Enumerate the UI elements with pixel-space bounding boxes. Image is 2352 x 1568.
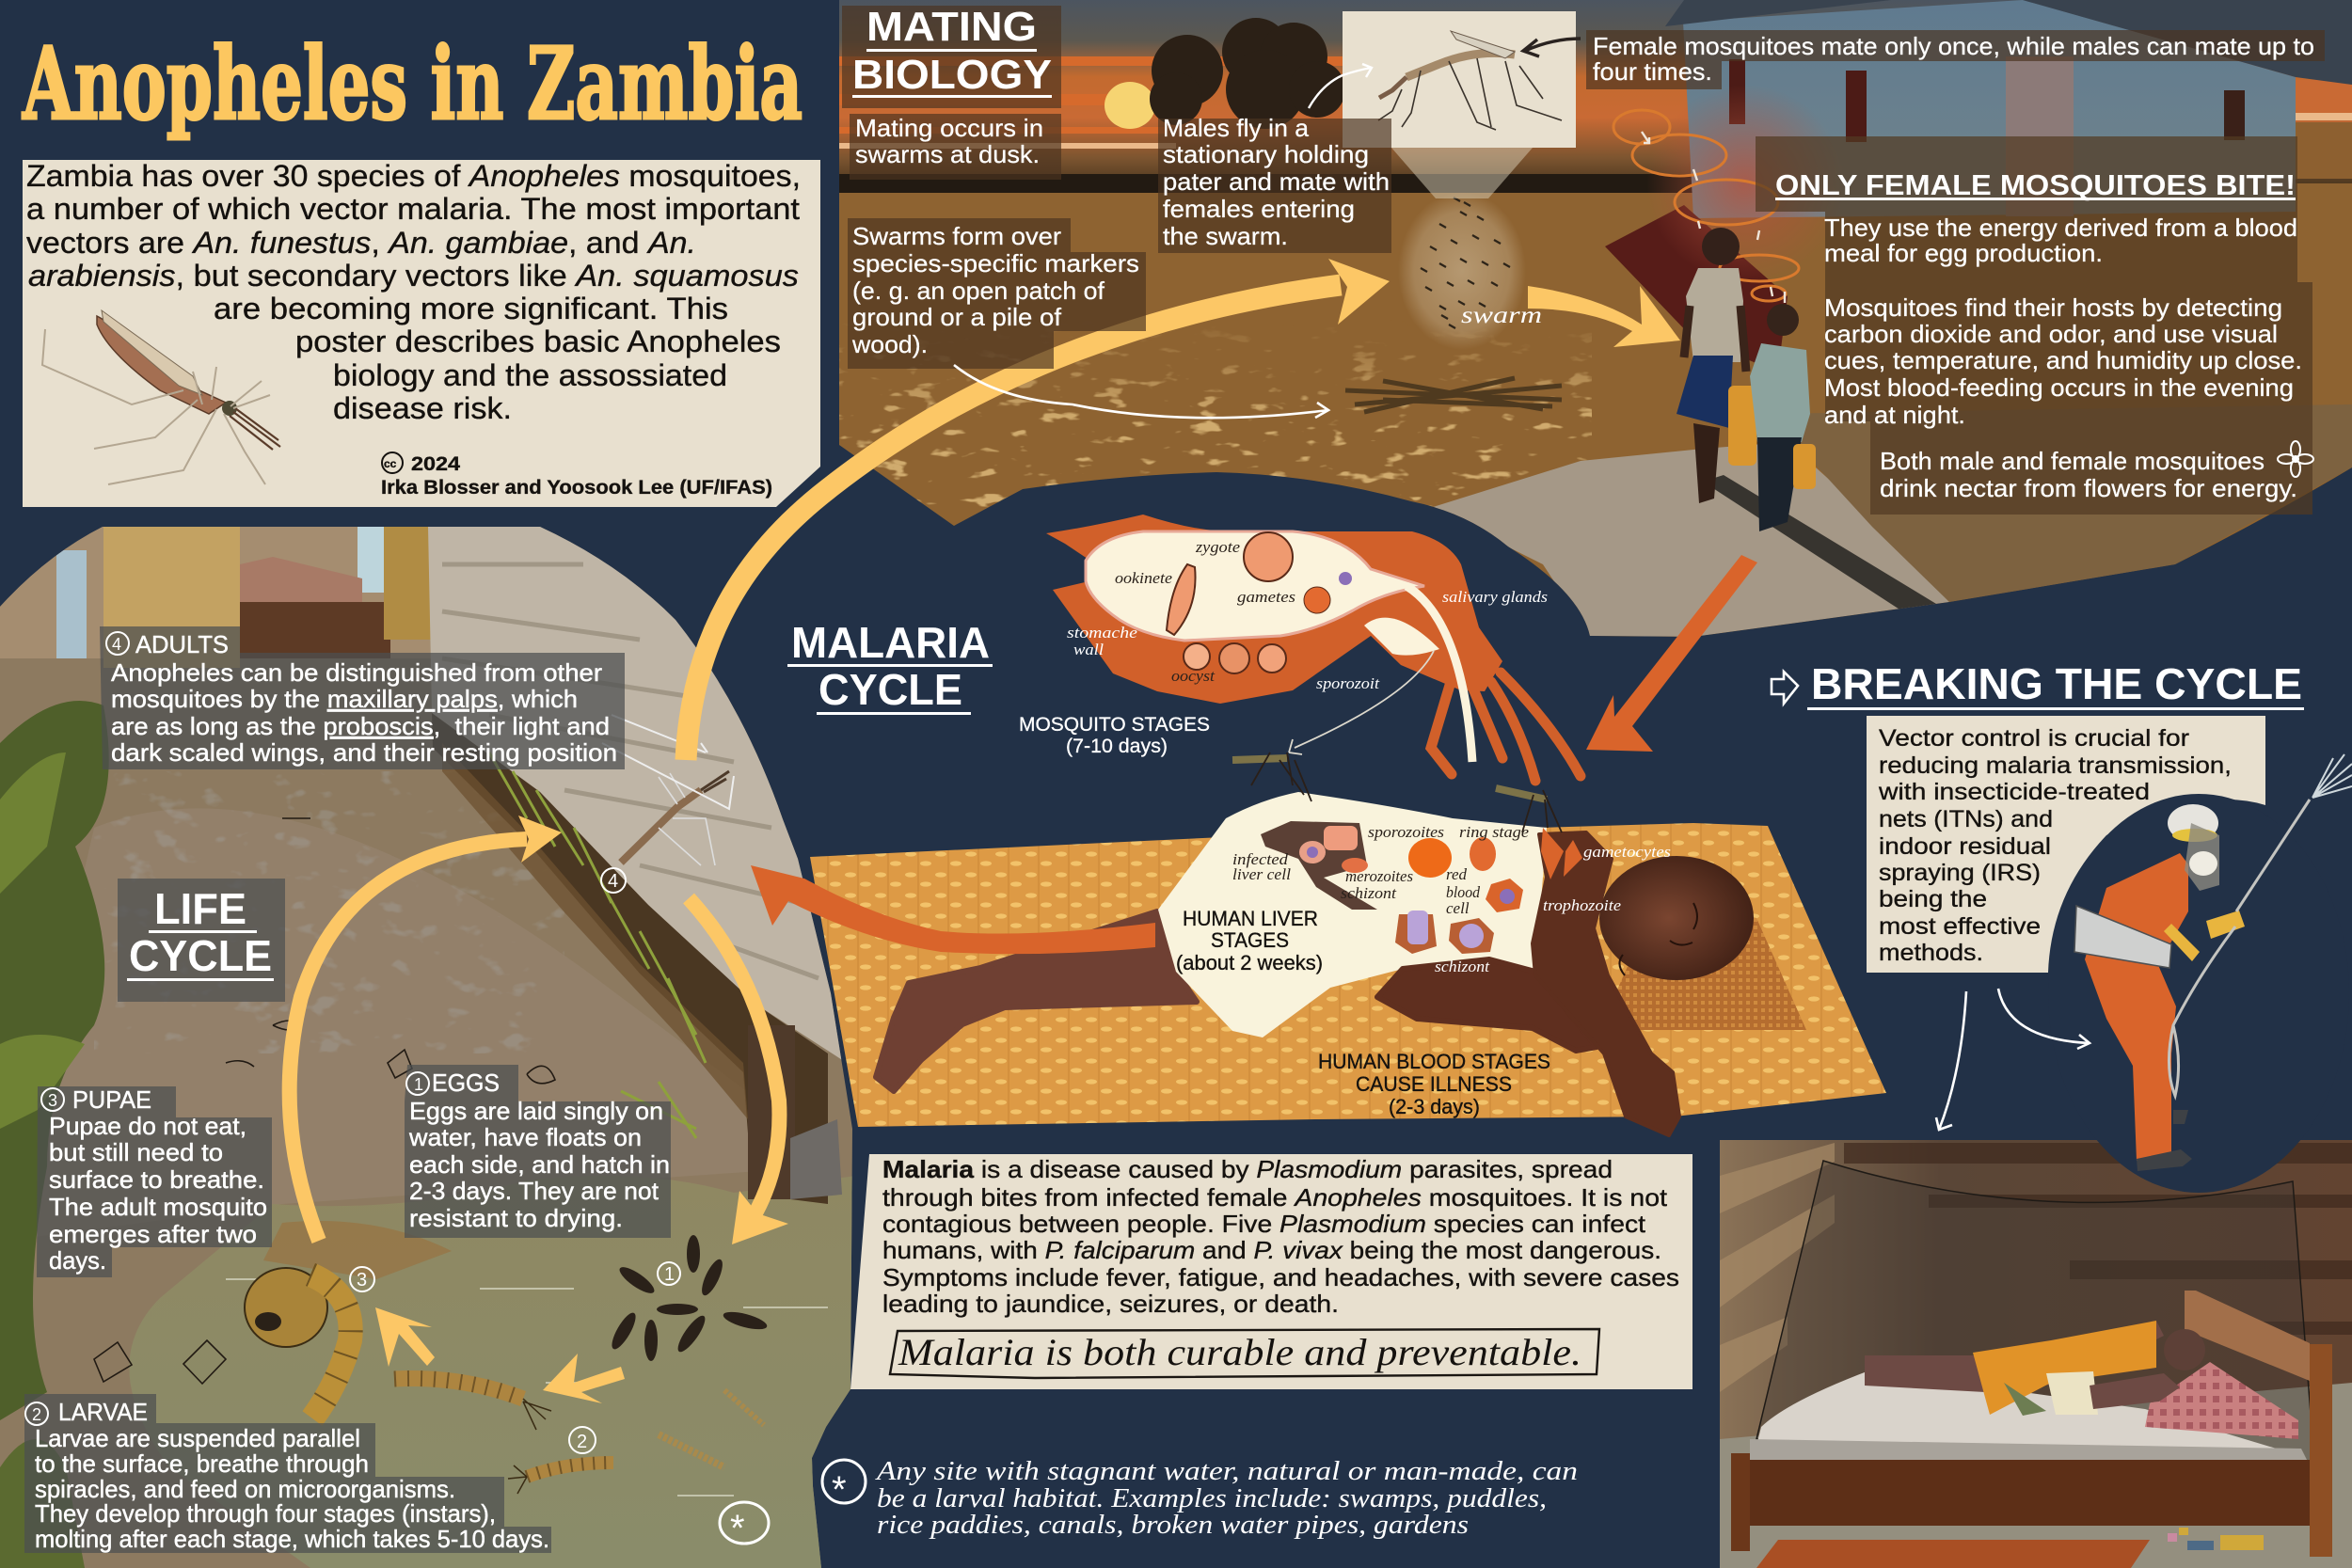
text: swarm markers: wood). bbox=[851, 330, 928, 358]
label: stomache wall: stomache bbox=[1067, 624, 1138, 641]
mouthparts bbox=[1431, 673, 1581, 781]
text: mating at dusk: swarms at dusk. bbox=[855, 140, 1040, 168]
arm bbox=[1533, 832, 1679, 1135]
road bbox=[1430, 442, 1949, 637]
panel: malaria description: through bites from infected female Anopheles mosquitoes. It is not bbox=[882, 1183, 1668, 1212]
panel: only female mosquitoes bite: ONLY FEMALE MOSQUITOES BITE! bbox=[1775, 168, 2296, 201]
eggs bbox=[608, 1235, 769, 1361]
panel: only female mosquitoes bite: meal for egg production. bbox=[1824, 239, 2103, 267]
panel: malaria description: Symptoms include fever, fatigue, and headaches, with severe cases bbox=[882, 1263, 1679, 1291]
text: mosquito stages: (7-10 days) bbox=[1066, 736, 1168, 757]
panel: vector control text: being the bbox=[1879, 886, 1987, 912]
heading: mating biology: MATING bbox=[866, 4, 1037, 50]
text: human blood stages: CAUSE ILLNESS bbox=[1356, 1072, 1512, 1096]
heading: life cycle: CYCLE bbox=[129, 931, 272, 980]
text: female mate once bbox=[1586, 30, 2325, 89]
text: males fly: pater and mate with bbox=[1163, 167, 1390, 196]
rocks bbox=[94, 818, 555, 1384]
post bbox=[748, 1025, 795, 1199]
text: larvae: They develop through four stages (instars), bbox=[35, 1499, 496, 1528]
helmet bbox=[2168, 804, 2218, 842]
face lines bbox=[1619, 903, 1697, 975]
text: eggs: Eggs are laid singly on bbox=[409, 1097, 663, 1125]
panel: only female mosquitoes bite: drink nectar from flowers for energy. bbox=[1880, 474, 2297, 502]
text: larvae: Larvae are suspended parallel bbox=[35, 1424, 360, 1452]
panel: navy circle with sprayer bbox=[2048, 794, 2349, 1193]
callout: curable and preventable: Malaria is both curable and preventable. bbox=[898, 1331, 1581, 1373]
headboard bbox=[2185, 1291, 2310, 1381]
net bbox=[1756, 1161, 2314, 1463]
star habitat marker bbox=[720, 1502, 769, 1549]
title: Anopheles in Zambia bbox=[22, 24, 803, 142]
liver bbox=[1261, 821, 1377, 910]
arrow: human back to mosquito bbox=[751, 865, 1155, 954]
biting mosquitoes bbox=[1232, 752, 1562, 832]
label: red blood cell: red bbox=[1446, 865, 1468, 883]
icon: larval habitat star bbox=[822, 1460, 866, 1511]
text: adults: are as long as the proboscis, their light and bbox=[111, 712, 610, 740]
liver cells bbox=[1324, 826, 1358, 850]
gametocyte cells bbox=[1541, 828, 1582, 879]
panel: introduction: disease risk. bbox=[333, 391, 512, 425]
panel: malaria description: leading to jaundice, seizures, or death. bbox=[882, 1290, 1339, 1318]
stage markers: 4 bbox=[608, 871, 618, 892]
label: infected liver cell bbox=[1232, 850, 1291, 883]
panel: introduction: biology and the assossiated bbox=[333, 358, 727, 392]
text: mating at dusk bbox=[850, 114, 1061, 180]
water bbox=[129, 1176, 856, 1568]
panel: malaria description: Malaria is a disease caused by Plasmodium parasites, spread bbox=[882, 1155, 1613, 1183]
wood pile bbox=[1345, 378, 1562, 412]
panel: only female mosquitoes bite bbox=[1756, 136, 2312, 515]
label: ookinete: ookinete bbox=[1115, 569, 1172, 587]
text: human liver stages: HUMAN LIVER bbox=[1183, 907, 1318, 930]
arrow: eggs to larva bbox=[543, 1354, 625, 1403]
text: mating at dusk: Mating occurs in bbox=[855, 114, 1043, 142]
sprayer worker bbox=[2074, 754, 2352, 1171]
panel: only female mosquitoes bite: Most blood-feeding occurs in the evening bbox=[1824, 373, 2294, 402]
text: human liver stages: STAGES bbox=[1211, 928, 1289, 952]
text: males fly: the swarm. bbox=[1163, 222, 1288, 250]
text: eggs: water, have floats on bbox=[408, 1123, 642, 1151]
text: adults: Anopheles can be distinguished from other bbox=[111, 658, 602, 687]
arrow: adult to eggs bbox=[689, 898, 779, 1218]
panel: vector control text: nets (ITNs) and bbox=[1879, 806, 2053, 832]
highlights bbox=[226, 1279, 828, 1496]
arrow head: adult to swarm bbox=[1328, 259, 1390, 325]
panel: vector control text: indoor residual bbox=[1879, 833, 2051, 860]
arrow: markers to wood pile bbox=[954, 365, 1328, 418]
text: males fly: stationary holding bbox=[1163, 140, 1369, 168]
toys bbox=[2168, 1528, 2264, 1550]
label: red blood cell bbox=[1446, 865, 1480, 917]
text: swarm markers: (e. g. an open patch of bbox=[852, 277, 1105, 305]
text: larval habitat note: rice paddies, canals, broken water pipes, gardens bbox=[877, 1511, 1469, 1540]
panel: life cycle scene bbox=[0, 527, 856, 1568]
heading: malaria cycle: MALARIA bbox=[791, 618, 990, 667]
panel: malaria description bbox=[850, 1154, 1692, 1389]
arrow: salivary to biting mosquito bbox=[1289, 651, 1434, 754]
text: pupae: emerges after two bbox=[49, 1220, 257, 1248]
sleepers bbox=[1865, 1321, 2164, 1392]
panel: introduction: Irka Blosser and Yoosook Lee (UF/IFAS) bbox=[381, 477, 772, 499]
label: sporozoit: sporozoit bbox=[1316, 674, 1380, 692]
panel: introduction: are becoming more significant. This bbox=[214, 292, 728, 325]
heading: malaria cycle: CYCLE bbox=[818, 665, 962, 714]
panel: vector control text bbox=[1867, 716, 2265, 973]
pupa bbox=[245, 1268, 351, 1418]
heading: breaking the cycle: BREAKING THE CYCLE bbox=[1811, 659, 2302, 708]
panel: mosquito stages diagram bbox=[1046, 515, 1581, 781]
label: red blood cell: blood bbox=[1446, 883, 1480, 901]
text: eggs: each side, and hatch in bbox=[409, 1150, 670, 1179]
rug bbox=[1756, 1540, 2150, 1568]
icon: creative commons bbox=[382, 452, 403, 473]
text: pupae bbox=[37, 1085, 272, 1277]
panel: introduction: vectors are An. funestus , An. gambiae , and An. bbox=[26, 226, 696, 260]
stage markers: 2 bbox=[577, 1432, 587, 1452]
label: salivary glands: salivary glands bbox=[1442, 588, 1548, 606]
text: adults bbox=[100, 626, 625, 769]
arrow: swarm to humans bbox=[1528, 286, 1680, 347]
text: mosquito stages: MOSQUITO STAGES bbox=[1019, 714, 1210, 736]
label: swarm: swarm bbox=[1461, 303, 1542, 328]
arrow head: pupa to adult bbox=[518, 816, 562, 863]
mating mosquito pair drawing bbox=[1378, 31, 1562, 130]
legs bbox=[876, 911, 1197, 1091]
icon: creative commons: cc bbox=[384, 457, 397, 470]
tank bbox=[2074, 906, 2171, 968]
label: schizont blood: schizont bbox=[1435, 958, 1490, 975]
panel: only female mosquitoes bite: and at night. bbox=[1824, 401, 1965, 429]
panel: introduction: 2024 bbox=[411, 453, 460, 475]
icon: sun bbox=[1104, 82, 1155, 129]
floor bbox=[1720, 1383, 2352, 1568]
text: adults: ADULTS bbox=[135, 630, 229, 658]
gloves bbox=[2164, 911, 2245, 961]
label: infected liver cell: liver cell bbox=[1232, 865, 1291, 883]
trees bbox=[1150, 18, 1345, 129]
mat bbox=[810, 823, 1886, 1127]
mosquito on wall bbox=[602, 715, 734, 865]
text: eggs: 1 bbox=[414, 1075, 423, 1094]
person: younger child bbox=[1750, 304, 1816, 531]
mattress on head bbox=[1605, 205, 1788, 372]
panel: introduction: a number of which vector malaria. The most important bbox=[26, 192, 800, 226]
panel: mating biology scene bbox=[839, 0, 2352, 644]
label: zygote: zygote bbox=[1195, 538, 1240, 556]
dusk sky bbox=[839, 0, 2352, 202]
label: red blood cell: cell bbox=[1446, 899, 1470, 917]
heading: mating biology: BIOLOGY bbox=[852, 52, 1052, 98]
arrow: to bed net bbox=[1936, 991, 1966, 1130]
arrow: male to inset bbox=[1309, 64, 1372, 108]
panel: bedroom with bed net bbox=[1720, 1140, 2352, 1568]
pillow bbox=[1599, 903, 1806, 1030]
arrow head: adult to eggs bbox=[732, 1191, 788, 1244]
stage markers bbox=[350, 868, 680, 1453]
panel: only female mosquitoes bite: Both male and female mosquitoes bbox=[1880, 447, 2265, 475]
panel: malaria description: humans, with P. falciparum and P. vivax being the most dangerous. bbox=[882, 1236, 1661, 1264]
text: pupae: days. bbox=[49, 1246, 106, 1275]
text: pupae: PUPAE bbox=[72, 1085, 151, 1114]
heading: malaria cycle bbox=[787, 618, 993, 715]
text: larvae: to the surface, breathe through bbox=[35, 1449, 369, 1478]
panel: vector control text: Vector control is crucial for bbox=[1879, 725, 2189, 752]
bush bbox=[0, 701, 109, 1420]
text: adults: mosquitoes by the maxillary palps , which bbox=[111, 685, 578, 713]
text: larvae: spiracles, and feed on microorganisms. bbox=[35, 1475, 455, 1503]
label: schizont liver: schizont bbox=[1341, 884, 1397, 902]
text: human liver stages: (about 2 weeks) bbox=[1176, 951, 1323, 974]
label: gametocytes: gametocytes bbox=[1583, 843, 1671, 861]
arrow: to inset bbox=[1523, 39, 1581, 56]
text: pupae: surface to breathe. bbox=[49, 1165, 264, 1194]
mattress bbox=[1750, 1370, 2301, 1472]
person: taller child bbox=[1677, 228, 1756, 503]
star habitat marker: * bbox=[730, 1508, 745, 1549]
house bbox=[1683, 0, 2296, 218]
text: males fly: Males fly in a bbox=[1163, 114, 1310, 142]
panel: only female mosquitoes bite: cues, temperature, and humidity up close. bbox=[1824, 346, 2302, 374]
corrugated wall bbox=[428, 527, 847, 1063]
label: infected liver cell: infected bbox=[1232, 850, 1289, 868]
arrow: mosquito to human bbox=[1586, 555, 1757, 752]
host-seeking swirls bbox=[1613, 110, 1799, 301]
panel: malaria description: contagious between people. Five Plasmodium species can infect bbox=[882, 1210, 1646, 1238]
worker suit bbox=[2085, 853, 2188, 1161]
text: swarm markers bbox=[848, 218, 1146, 369]
text: swarm markers: ground or a pile of bbox=[852, 303, 1062, 331]
text: eggs bbox=[405, 1065, 671, 1238]
text: swarm markers: Swarms form over bbox=[852, 222, 1061, 250]
text: human liver stages bbox=[1176, 907, 1323, 974]
text: larvae: molting after each stage, which takes 5-10 days. bbox=[35, 1525, 549, 1553]
arrow: to sprayer bbox=[1998, 989, 2090, 1049]
label: merozoites: merozoites bbox=[1345, 867, 1413, 885]
text: pupae: but still need to bbox=[49, 1138, 223, 1166]
label: sporozoites: sporozoites bbox=[1368, 823, 1444, 841]
text: adults: 4 bbox=[112, 635, 121, 654]
arrow: adult to swarm bbox=[686, 285, 1341, 760]
mosquito body bbox=[1046, 515, 1502, 704]
arrow: larva to pupa bbox=[375, 1307, 435, 1367]
inset: mating mosquitoes bbox=[1343, 11, 1576, 148]
label: oocyst: oocyst bbox=[1171, 667, 1216, 685]
panel: only female mosquitoes bite: carbon dioxide and odor, and use visual bbox=[1824, 320, 2278, 348]
text: eggs: 2-3 days. They are not bbox=[409, 1177, 660, 1205]
swirl arrows bbox=[1642, 132, 1785, 303]
heading: life cycle bbox=[118, 879, 285, 1002]
stage markers: 1 bbox=[664, 1264, 675, 1285]
heading: life cycle: LIFE bbox=[154, 884, 246, 933]
icon: larval habitat star: * bbox=[832, 1469, 847, 1511]
soil bank bbox=[432, 713, 828, 1204]
text: female mate once: four times. bbox=[1593, 57, 1712, 86]
grass bbox=[489, 752, 706, 1138]
shirt bbox=[1158, 792, 1547, 1037]
arrow: pupa to adult bbox=[290, 839, 527, 1241]
text: pupae: The adult mosquito bbox=[49, 1193, 267, 1221]
icon: anopheles mosquito bbox=[42, 310, 280, 484]
cells bbox=[1244, 532, 1293, 581]
text: larvae: LARVAE bbox=[58, 1398, 148, 1426]
panel: vector control text: with insecticide-treated bbox=[1878, 779, 2150, 805]
panel: vector control text: spraying (IRS) bbox=[1879, 860, 2041, 886]
panel: vector control text: methods. bbox=[1879, 940, 1983, 966]
icon: flower bbox=[2278, 441, 2313, 477]
text: eggs: EGGS bbox=[432, 1069, 500, 1097]
text: adults: dark scaled wings, and their resting position bbox=[111, 738, 617, 767]
text: pupae: 3 bbox=[48, 1091, 57, 1110]
panel: vector control text: most effective bbox=[1879, 913, 2041, 940]
face shield bbox=[2185, 823, 2219, 891]
text: larval habitat note: Any site with stagnant water, natural or man-made, can bbox=[875, 1457, 1578, 1486]
text: eggs: resistant to drying. bbox=[409, 1204, 623, 1232]
text: larvae bbox=[24, 1394, 551, 1553]
panel: only female mosquitoes bite: Mosquitoes find their hosts by detecting bbox=[1824, 293, 2282, 322]
ground bbox=[0, 527, 856, 1568]
text: female mate once: Female mosquitoes mate only once, while males can mate up to bbox=[1593, 32, 2314, 60]
bent leg bbox=[1377, 959, 1597, 1051]
spray bbox=[2312, 754, 2352, 798]
red blood cells bbox=[1408, 838, 1452, 878]
swarm cloud bbox=[1398, 192, 1526, 350]
panel: introduction: poster describes basic Anopheles bbox=[295, 325, 781, 358]
text: pupae: Pupae do not eat, bbox=[49, 1112, 246, 1140]
panel: introduction: Zambia has over 30 species of Anopheles mosquitoes, bbox=[26, 159, 801, 193]
text: males fly: females entering bbox=[1163, 195, 1355, 223]
text: larvae: 2 bbox=[32, 1405, 41, 1424]
label: ring stage: ring stage bbox=[1459, 823, 1529, 841]
label: stomache wall bbox=[1067, 624, 1138, 658]
panel: introduction: arabiensis , but secondary vectors like An. squamosus bbox=[28, 259, 799, 293]
lance bbox=[2236, 800, 2310, 911]
buildings bbox=[0, 527, 433, 658]
funnel bbox=[1391, 148, 1533, 198]
head bbox=[1599, 856, 1754, 980]
icon: outline arrow bbox=[1772, 672, 1798, 704]
text: human blood stages: HUMAN BLOOD STAGES bbox=[1318, 1050, 1550, 1073]
text: swarm markers: species-specific markers bbox=[852, 249, 1139, 277]
panel: vector control text: reducing malaria transmission, bbox=[1879, 752, 2232, 779]
text: larval habitat note bbox=[875, 1457, 1578, 1540]
text: larval habitat note: be a larval habitat. Examples include: swamps, puddles, bbox=[877, 1484, 1547, 1513]
text: mosquito stages bbox=[1019, 714, 1210, 757]
panel: only female mosquitoes bite: They use the energy derived from a blood bbox=[1824, 214, 2297, 242]
label: trophozoite: trophozoite bbox=[1543, 896, 1621, 914]
boots bbox=[2137, 1110, 2192, 1171]
ground bbox=[839, 183, 2352, 644]
label: gametes: gametes bbox=[1237, 588, 1295, 606]
text: human blood stages: (2-3 days) bbox=[1389, 1095, 1480, 1118]
panel: sleeping boy on mat bbox=[810, 752, 1886, 1135]
label: stomache wall: wall bbox=[1073, 641, 1104, 658]
pillow bbox=[2145, 1362, 2298, 1439]
larva bbox=[394, 1378, 764, 1494]
stage markers: 3 bbox=[357, 1270, 367, 1291]
heading: mating biology bbox=[842, 4, 1061, 108]
text: males fly bbox=[1158, 114, 1391, 253]
frame bbox=[1743, 1460, 2317, 1526]
text: human blood stages bbox=[1318, 1050, 1550, 1118]
